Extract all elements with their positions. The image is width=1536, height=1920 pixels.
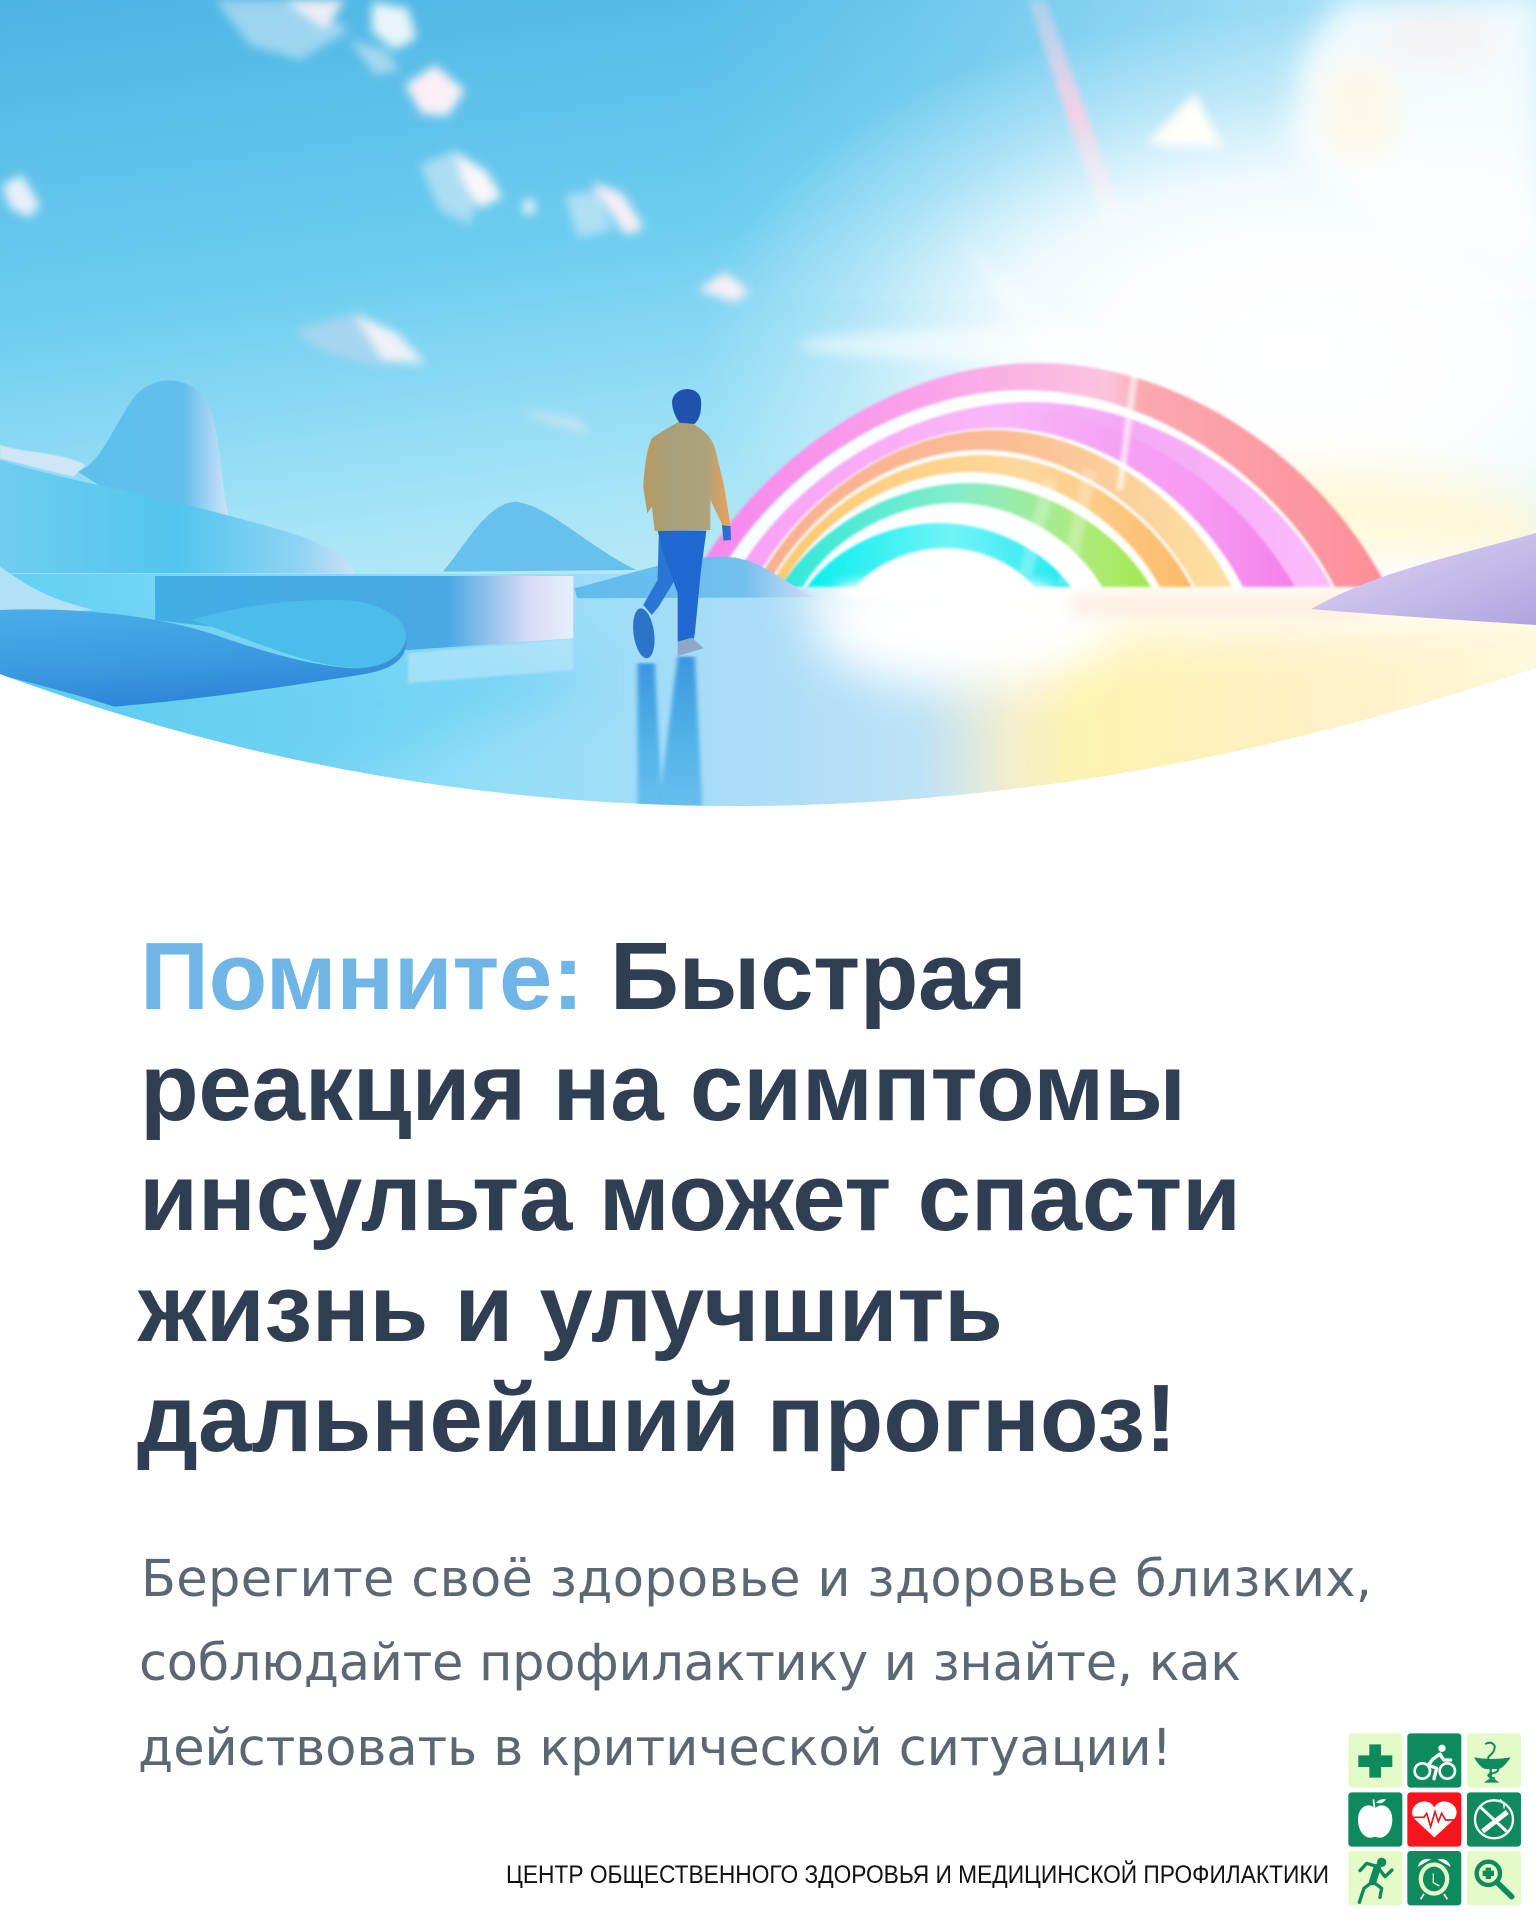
horizon glow — [815, 563, 1115, 687]
jacket — [643, 422, 730, 531]
lifted leg — [643, 536, 674, 615]
rainbow arcs — [689, 363, 1387, 587]
headline line 4: жизнь и улучшить — [137, 1255, 1003, 1362]
purple hill — [1311, 533, 1536, 625]
floor left shade — [12, 642, 582, 778]
reflective floor — [0, 574, 1536, 814]
body text — [138, 1550, 1372, 1778]
tile: alarm clock — [1407, 1851, 1461, 1905]
tile: medical cross — [1348, 1733, 1402, 1788]
hero illustration — [0, 0, 1536, 814]
large dune — [0, 460, 355, 573]
footer organisation name: ЦЕНТР ОБЩЕСТВЕННОГО ЗДОРОВЬЯ И МЕДИЦИНСКОЙ ПРОФИЛАКТИКИ — [506, 1859, 1329, 1889]
foot-of-rainbow glow — [835, 578, 1055, 602]
walker reflection — [637, 657, 702, 807]
headline line 5: дальнейший прогноз! — [137, 1365, 1177, 1472]
headline line 1: Помните: Быстрая — [140, 923, 1027, 1030]
cylinder podium — [155, 576, 573, 650]
tile: no smoking — [1467, 1792, 1521, 1847]
foreground left hill — [0, 566, 94, 611]
tile: magnifier — [1467, 1851, 1521, 1905]
tile: apple — [1348, 1792, 1402, 1847]
tile: heart with pulse — [1407, 1792, 1461, 1847]
body line 3: действовать в критической ситуации! — [138, 1719, 1172, 1778]
standing shoe — [678, 638, 704, 656]
cylinder reflection — [408, 638, 573, 683]
far mound — [78, 380, 228, 517]
light ray — [1026, 0, 1114, 210]
lifted shoe — [633, 608, 654, 658]
headline line 2: реакция на симптомы — [140, 1034, 1186, 1141]
headline line 3: инсульта может спасти — [139, 1144, 1241, 1251]
head and hair — [672, 389, 701, 424]
headline — [137, 923, 1241, 1472]
health icons logo grid — [1348, 1733, 1521, 1905]
rainbow reflection — [1070, 594, 1360, 616]
rainbow light streak — [1025, 362, 1136, 585]
body line 1: Берегите своё здоровье и здоровье близких, — [141, 1550, 1372, 1609]
tile: bicycle — [1407, 1733, 1461, 1788]
planted leg — [658, 531, 706, 642]
distant hill — [443, 502, 636, 572]
tile: runner — [1348, 1851, 1402, 1905]
top-right cloud mass — [1290, 0, 1536, 250]
mound behind the walker — [574, 557, 815, 598]
small white cloud on dune — [0, 445, 86, 477]
fold inner surface — [192, 600, 406, 668]
hand — [722, 525, 731, 541]
pale sheen on right of floor — [800, 545, 1536, 635]
white halo inside rainbow — [712, 390, 1335, 587]
walking man — [630, 389, 731, 659]
clouds — [2, 0, 1222, 435]
fold outer surface — [0, 609, 407, 707]
tile: bowl of hygieia — [1467, 1733, 1521, 1788]
body line 2: соблюдайте профилактику и знайте, как — [139, 1634, 1241, 1693]
sky — [0, 0, 1536, 574]
